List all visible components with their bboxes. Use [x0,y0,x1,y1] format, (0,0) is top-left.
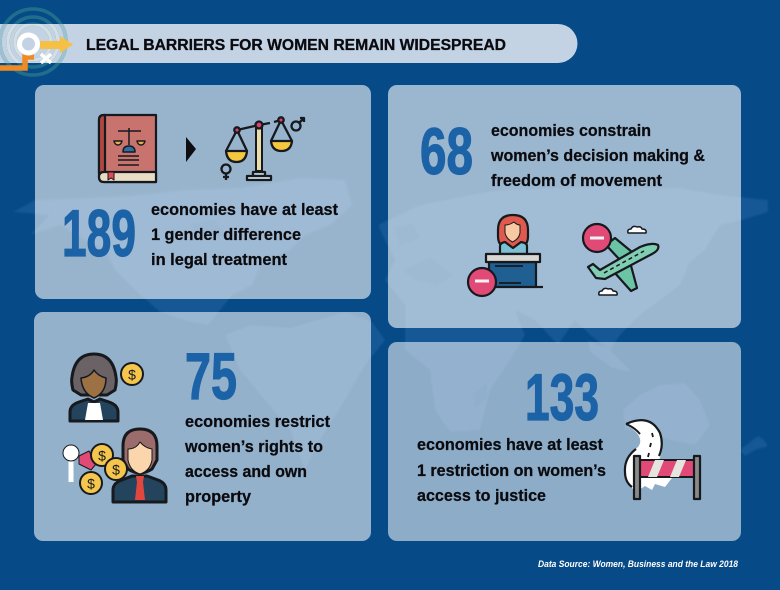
icon: man with keys and coins [63,429,166,502]
icon: woman at desk [468,215,543,296]
logo icon [0,9,73,75]
panel 4 content [417,360,700,505]
text [151,201,338,269]
data source: Data Source: Women, Business and the Law 2018 [538,559,739,570]
text: women’s rights to [184,438,323,456]
panel: 68 economies [388,85,741,328]
icon: woman with coin: $ [128,366,136,382]
panel: 75 economies [34,312,371,541]
number 189: 189 [62,196,136,270]
text: 1 restriction on women’s [417,462,606,480]
icon: airplane [583,224,658,295]
icon: man with keys and coins: $ [98,448,106,464]
text: access to justice [417,487,546,505]
icon: woman with coin [70,354,143,421]
arrow [186,137,196,162]
text [184,413,330,506]
text: freedom of movement [491,172,662,190]
text: property [185,488,252,506]
icon: road barrier [625,420,700,499]
text: economies constrain [491,122,651,140]
text [417,436,606,505]
text: access and own [185,463,307,481]
title: LEGAL BARRIERS FOR WOMEN REMAIN WIDESPREAD [86,37,506,54]
text: 1 gender difference [151,226,301,244]
panel: 189 economies [35,85,371,299]
icon: scales [222,117,304,180]
text: economies restrict [185,413,330,431]
text: economies have at least [417,436,603,454]
icon: man with keys and coins: $ [87,476,95,492]
title banner [0,24,577,63]
icon: law book [99,115,156,182]
number 133: 133 [525,360,599,434]
icon: man with keys and coins: $ [112,462,120,478]
text: economies have at least [151,201,338,219]
panel: 133 economies [388,342,741,541]
panel 1 content [62,115,338,270]
number 75: 75 [185,339,237,413]
text [490,122,705,190]
text: in legal treatment [151,251,287,269]
panels [34,85,741,541]
panel 2 content [420,114,705,296]
panel 3 content [63,339,330,506]
world map [13,178,768,470]
number 68: 68 [420,114,473,188]
banner pill [0,24,577,63]
text: women’s decision making & [490,147,705,165]
